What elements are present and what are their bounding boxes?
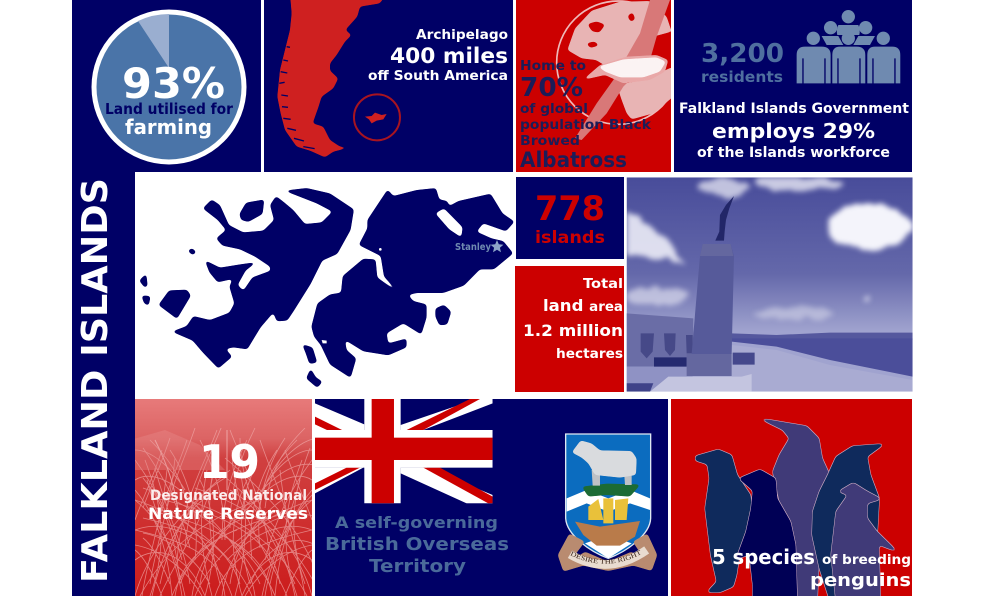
- label: land area: land area: [543, 296, 623, 315]
- label: farming: farming: [125, 115, 212, 139]
- panel: land use: [72, 0, 261, 172]
- panel: nature reserves: [130, 399, 320, 596]
- statistic: 93%: 93%: [122, 59, 225, 108]
- label: of breeding: of breeding: [822, 553, 911, 568]
- sea: [732, 338, 913, 377]
- label: total: Total: [583, 277, 623, 292]
- plaques: [641, 333, 693, 358]
- label: Albatross: Albatross: [520, 148, 627, 172]
- base: [650, 374, 752, 392]
- inlets: [322, 208, 463, 343]
- panel: overseas territory: [315, 399, 668, 596]
- label: Territory: Territory: [369, 556, 466, 577]
- icon: coat of arms: [558, 433, 657, 571]
- label: residents: residents: [701, 68, 783, 86]
- stone wall: [627, 313, 693, 367]
- panel: vertical title: [72, 172, 135, 596]
- statistic: 778: 778: [535, 189, 605, 229]
- statistic: 3,200: 3,200: [701, 39, 784, 69]
- label: Falkland Islands Government: Falkland Islands Government: [679, 101, 909, 117]
- icon: group of people: [797, 10, 900, 83]
- pie chart: 93 percent farming: [94, 12, 244, 162]
- flag: Union Jack: [315, 399, 493, 503]
- statistic: 1.2 million: 1.2 million: [523, 321, 623, 340]
- label: of global: of global: [520, 101, 588, 117]
- label: penguins: penguins: [810, 570, 911, 591]
- scroll: [558, 533, 657, 572]
- label: archipelago: Archipelago: [416, 27, 508, 43]
- panel: island map: [135, 173, 516, 399]
- label: Stanley: Stanley: [455, 242, 492, 253]
- label: Browed: Browed: [520, 133, 580, 149]
- statistic: 70%: 70%: [520, 73, 583, 103]
- map: Falkland Islands: [139, 188, 515, 388]
- map: South America tip: [277, 0, 400, 157]
- label: British Overseas: British Overseas: [325, 534, 509, 555]
- label: population Black: population Black: [520, 117, 652, 133]
- label: hectares: hectares: [556, 347, 623, 362]
- photo: liberation monument: [620, 175, 913, 392]
- label: home to: Home to: [520, 58, 586, 74]
- title: FALKLAND ISLANDS: [75, 178, 116, 583]
- statistic: 19: 19: [199, 435, 260, 489]
- statistic: employs 29%: employs 29%: [712, 119, 875, 143]
- panel: location: [264, 0, 513, 172]
- far hills: [732, 333, 913, 340]
- label: off South America: off South America: [368, 68, 508, 84]
- icon: star: [491, 240, 503, 252]
- panel: land area: [515, 266, 624, 392]
- label: of the Islands workforce: of the Islands workforce: [697, 145, 890, 161]
- sheep: [572, 440, 637, 486]
- panel: albatross: [516, 0, 680, 172]
- statistic: 400 miles: 400 miles: [390, 44, 508, 68]
- label: land utilised for: Land utilised for: [105, 100, 234, 118]
- illustration: five penguins: [695, 418, 898, 601]
- label: Designated National: Designated National: [150, 488, 307, 504]
- pavement: [627, 367, 697, 392]
- label: Nature Reserves: Nature Reserves: [148, 504, 308, 523]
- illustration: globe and albatross: [557, 0, 680, 140]
- motto: DESIRE THE RIGHT: [570, 550, 641, 564]
- panel: penguins: [671, 399, 912, 601]
- statue: [715, 196, 734, 241]
- bench: [654, 357, 687, 367]
- photo: tussac grass: [135, 428, 312, 596]
- label: islands: islands: [535, 228, 605, 248]
- marker: circle around the Falklands: [354, 94, 400, 140]
- road: [730, 345, 913, 392]
- label: 5 species: 5 species: [712, 545, 815, 569]
- label: a self-governing: A self-governing: [335, 513, 498, 532]
- column: [692, 244, 734, 354]
- panel: 778 islands: [516, 177, 624, 259]
- panel: population: [674, 0, 912, 172]
